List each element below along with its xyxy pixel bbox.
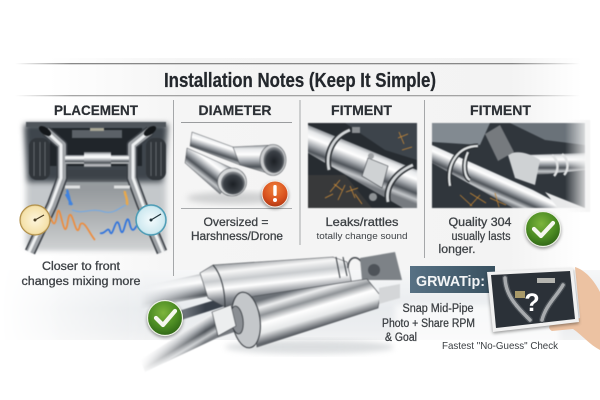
- caption: leaks: [316, 215, 408, 242]
- icon: check large: [148, 300, 182, 336]
- tip label: GRWATip:: [416, 273, 485, 290]
- tip label: [410, 266, 495, 293]
- gauge: cool: [136, 205, 166, 235]
- caption: quality: Quality 304: [448, 217, 512, 229]
- icon: phone with mid-pipe photo: [487, 268, 579, 332]
- tip text: Fastest "No-Guess" Check: [442, 340, 559, 352]
- heading: diameter: DIAMETER: [198, 102, 272, 118]
- panel: diameter: [181, 102, 292, 243]
- title: Installation Notes (Keep It Simple): [164, 70, 436, 92]
- panel: GRWA tip: [382, 266, 600, 353]
- caption: placement: [22, 261, 140, 288]
- upper muffler: [200, 257, 352, 307]
- heading: fitment: FITMENT: [331, 102, 392, 118]
- smoke: [32, 182, 160, 250]
- icon: check: [526, 212, 560, 246]
- panel: placement: [20, 102, 168, 288]
- caption: placement: Closer to front: [42, 261, 121, 273]
- icon: warning: [262, 181, 288, 207]
- illustration: two pipes: [185, 132, 286, 204]
- background band: [0, 58, 600, 340]
- arrows and waves: [66, 190, 72, 205]
- icon: hand: [549, 267, 600, 350]
- caption: quality: longer.: [438, 244, 476, 256]
- illustration: mufflers: [140, 252, 402, 372]
- tip text: & Goal: [385, 332, 417, 344]
- crossover: [65, 155, 129, 164]
- caption: quality: [438, 217, 512, 256]
- caption: diameter: [191, 215, 283, 243]
- caption: diameter: Oversized =: [204, 215, 268, 229]
- upper pipe: [144, 274, 208, 307]
- illustration: stainless pipe with clamp: [432, 120, 590, 212]
- heading: placement: PLACEMENT: [54, 102, 138, 118]
- pipes: [29, 131, 163, 252]
- illustration: undercarriage with dual pipes: [24, 122, 168, 252]
- illustration: clamped pipe with sparks: [308, 123, 417, 208]
- caption: leaks: Leaks/rattles: [326, 215, 398, 229]
- panel: fitment quality: [432, 102, 590, 256]
- caption: diameter: Harshness/Drone: [191, 229, 283, 243]
- icon: phone with mid-pipe photo: ?: [524, 289, 540, 317]
- caption: leaks: totally change sound: [316, 231, 408, 242]
- caption: quality: usually lasts: [452, 231, 511, 243]
- tip text: Snap Mid-Pipe: [402, 303, 474, 315]
- tip text: [382, 303, 559, 352]
- tires: [29, 138, 166, 180]
- lower pipe: [140, 305, 240, 372]
- heading: fitment: FITMENT: [470, 102, 531, 118]
- lower muffler: [250, 279, 380, 347]
- panel: fitment leaks: [308, 102, 417, 242]
- caption: placement: changes mixing more: [22, 276, 140, 288]
- gauge: warm: [20, 205, 50, 235]
- tip text: Photo + Share RPM: [382, 318, 475, 330]
- clamps: [328, 130, 413, 202]
